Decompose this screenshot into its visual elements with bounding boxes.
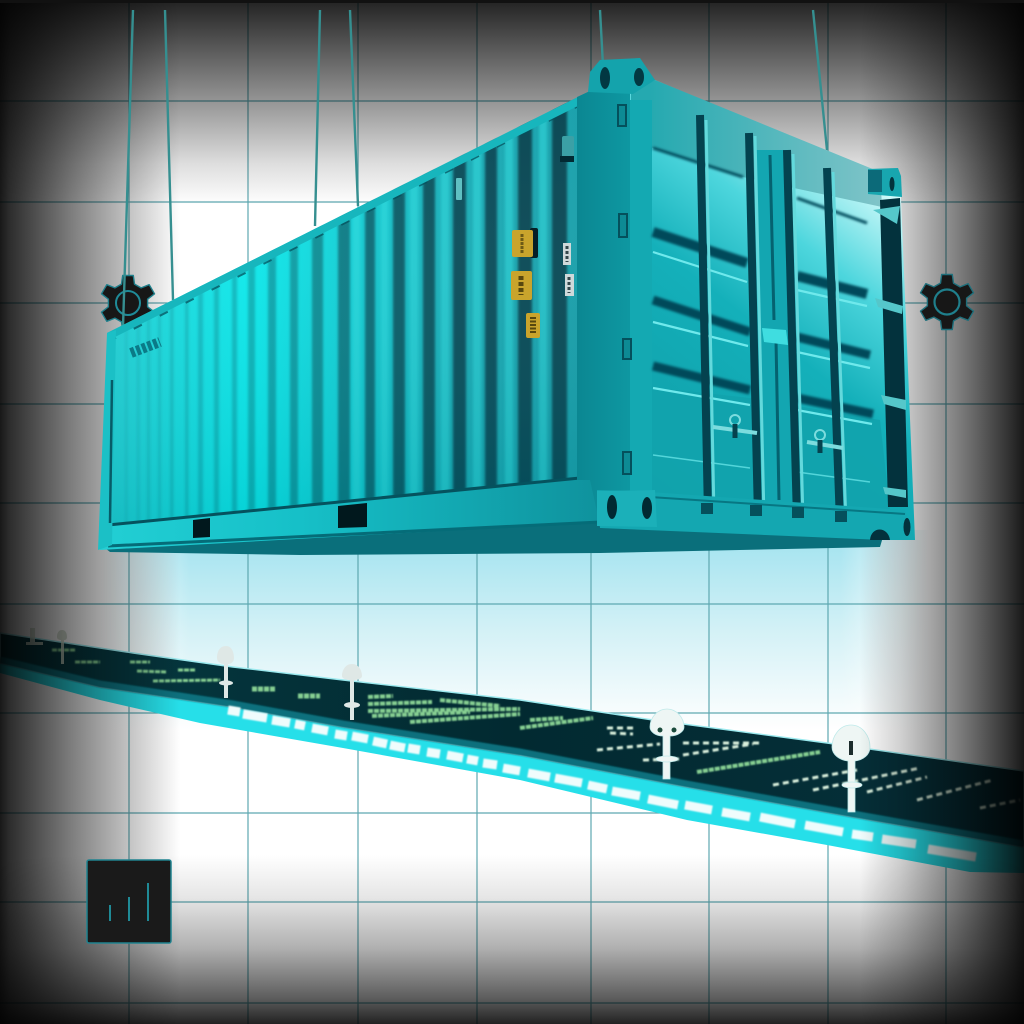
door locking bar 4 — [827, 168, 846, 523]
timeline belt — [0, 628, 1024, 873]
door handle right — [807, 430, 843, 453]
lock rod bases — [701, 503, 847, 522]
faded pins at belt start — [26, 628, 67, 664]
container side wall — [107, 91, 590, 525]
side label — [131, 342, 160, 353]
timeline pin 2 — [342, 664, 362, 720]
door handle left — [713, 415, 757, 438]
vignette top — [0, 0, 1024, 205]
door right dark column — [880, 198, 908, 507]
top right corner casting — [868, 168, 902, 197]
door locking bar 1 — [700, 115, 714, 515]
gear icon right — [920, 274, 974, 330]
chart icon — [87, 860, 171, 943]
belt dark surface — [0, 633, 1024, 847]
door hinges — [618, 105, 631, 474]
door locking bar 2 — [749, 133, 764, 517]
belt glowing strip — [0, 663, 1024, 873]
side wall corrugation — [112, 102, 577, 523]
forklift pocket 2 — [338, 503, 367, 528]
gear icon left — [102, 276, 154, 330]
door dark panel bands — [653, 148, 873, 414]
vignette left — [0, 0, 180, 1024]
bottom right corner casting — [870, 518, 910, 540]
timeline pin 3 — [650, 709, 684, 779]
belt light segments — [228, 710, 976, 857]
door center seam — [756, 150, 798, 520]
door lower panel — [630, 385, 890, 510]
door left margin — [630, 100, 652, 490]
small side markers — [456, 136, 574, 200]
door top strip — [631, 80, 882, 207]
door face — [600, 80, 915, 540]
door locking bar 3 — [787, 150, 803, 520]
front corner post — [577, 91, 632, 525]
timeline pin 1 — [217, 646, 234, 698]
left corner post — [98, 330, 116, 550]
shipping container — [98, 58, 915, 555]
belt lower edge — [0, 660, 1024, 844]
white side tags — [563, 243, 574, 296]
vignette bottom — [0, 855, 1024, 1024]
top left corner casting — [588, 58, 655, 94]
rail lower line — [108, 522, 600, 546]
timeline pin 4 — [832, 725, 870, 812]
belt green text marks — [52, 650, 820, 772]
rail upper line — [108, 477, 590, 525]
side bottom rail — [100, 478, 600, 550]
belt white text marks — [597, 728, 1020, 808]
lifting cables — [123, 10, 827, 327]
light blue glow under container — [100, 530, 930, 730]
container underside — [100, 518, 885, 555]
forklift pocket 1 — [193, 518, 210, 538]
door right brackets — [873, 206, 906, 498]
vignette right — [860, 0, 1024, 1024]
door bottom sill — [597, 490, 915, 540]
side top rail — [107, 91, 592, 341]
door light panel lines — [653, 252, 872, 482]
yellow warning tags — [511, 228, 540, 338]
side wall highlights — [354, 122, 548, 499]
top scallops — [107, 98, 590, 340]
bottom left corner casting — [597, 490, 657, 527]
top frame edge — [0, 0, 1024, 3]
